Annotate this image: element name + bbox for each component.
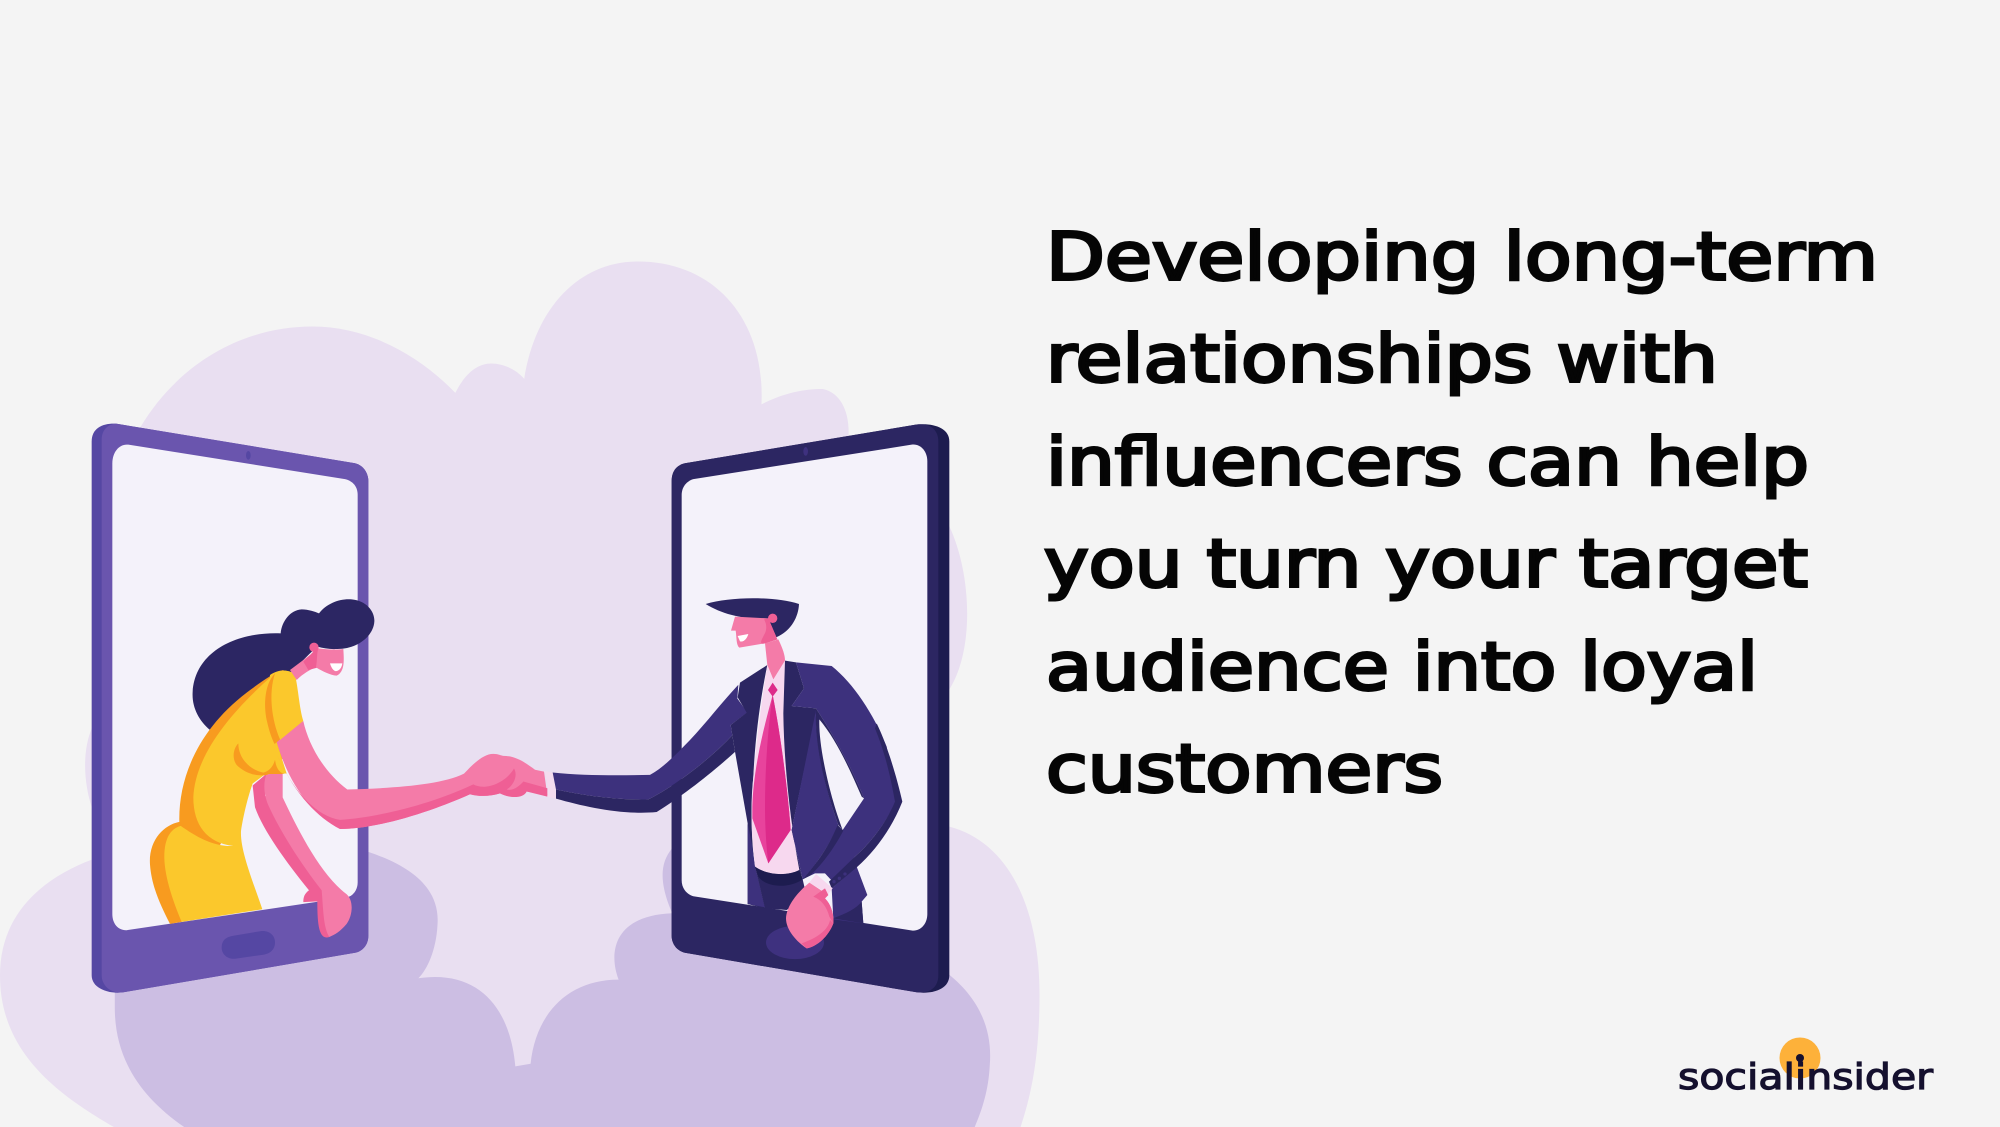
headline text [1044, 218, 1878, 808]
jacket lower right [832, 867, 867, 923]
tablet camera [246, 451, 251, 460]
hair [706, 598, 799, 637]
shoulder top [270, 671, 303, 740]
logo wordmark: socialinsider [1678, 1057, 1933, 1098]
extended arm shadow [556, 735, 735, 813]
left tablet [92, 424, 368, 993]
headline text: relationships with [1046, 320, 1718, 398]
headline text: Developing long-term [1046, 218, 1878, 296]
back arm [264, 774, 352, 937]
dress [164, 671, 303, 922]
tablet camera [803, 447, 808, 456]
shirt [752, 661, 799, 874]
jacket hem shadow [833, 902, 863, 923]
forearm shadow [803, 825, 843, 879]
front arm shadow [273, 746, 547, 829]
tablet body [102, 424, 368, 992]
socialinsider logo [1678, 1038, 1933, 1098]
tablet home button [766, 926, 824, 959]
chest fold [234, 743, 275, 775]
tablet side [92, 424, 368, 993]
woman's body and arms [150, 670, 556, 937]
woman's hair [193, 599, 374, 730]
woman's head and dress folds [234, 643, 344, 775]
fist shadow [802, 920, 833, 948]
ear [768, 614, 777, 623]
tablet body [672, 424, 938, 993]
darker lilac cloud [115, 848, 990, 1127]
jacket right panel [783, 661, 816, 879]
sleeve hem fold [265, 760, 285, 774]
extended arm [553, 685, 747, 799]
logo dot [1796, 1054, 1804, 1062]
smile [738, 634, 748, 642]
tablet screen [112, 445, 358, 930]
jacket left panel [731, 665, 767, 908]
neck [765, 639, 785, 680]
neck shadow [303, 647, 318, 670]
headline text: audience into loyal [1046, 628, 1758, 706]
jaw shadow [761, 618, 777, 644]
tie blade [752, 695, 791, 863]
headline text: influencers can help [1046, 424, 1809, 500]
jacket left lower [748, 823, 765, 907]
trousers [755, 867, 807, 910]
thumb shadow [813, 888, 833, 923]
tablet home button [222, 931, 275, 959]
jacket front [792, 710, 838, 879]
logo orange circle [1780, 1038, 1820, 1078]
tablet screen [682, 445, 927, 931]
man's head and torso [706, 598, 902, 948]
light lilac cloud [0, 261, 1040, 1127]
ear [309, 643, 319, 652]
bent arm inner shadow [816, 708, 864, 830]
tablet side [672, 424, 949, 993]
headline text: customers [1046, 730, 1443, 808]
bent arm [792, 662, 896, 882]
face [731, 617, 777, 648]
smile [330, 663, 342, 671]
tie shade [765, 695, 791, 863]
sleeve fold [265, 673, 280, 744]
bent arm outer shadow [829, 723, 902, 888]
face [316, 648, 344, 676]
back arm shadow [253, 774, 329, 937]
shirt cuff [809, 874, 833, 894]
sleeve buttons [832, 872, 847, 883]
front arm and hand [277, 721, 547, 829]
belt [755, 867, 803, 886]
woman's sleeve cuff [544, 771, 556, 799]
tie knot [768, 683, 778, 697]
dress shadow [150, 670, 287, 924]
fist [786, 883, 833, 948]
right tablet with man's arm [553, 424, 949, 993]
headline text: you turn your target [1044, 526, 1808, 602]
background cloud shapes [0, 261, 1040, 1127]
neck [290, 655, 317, 680]
